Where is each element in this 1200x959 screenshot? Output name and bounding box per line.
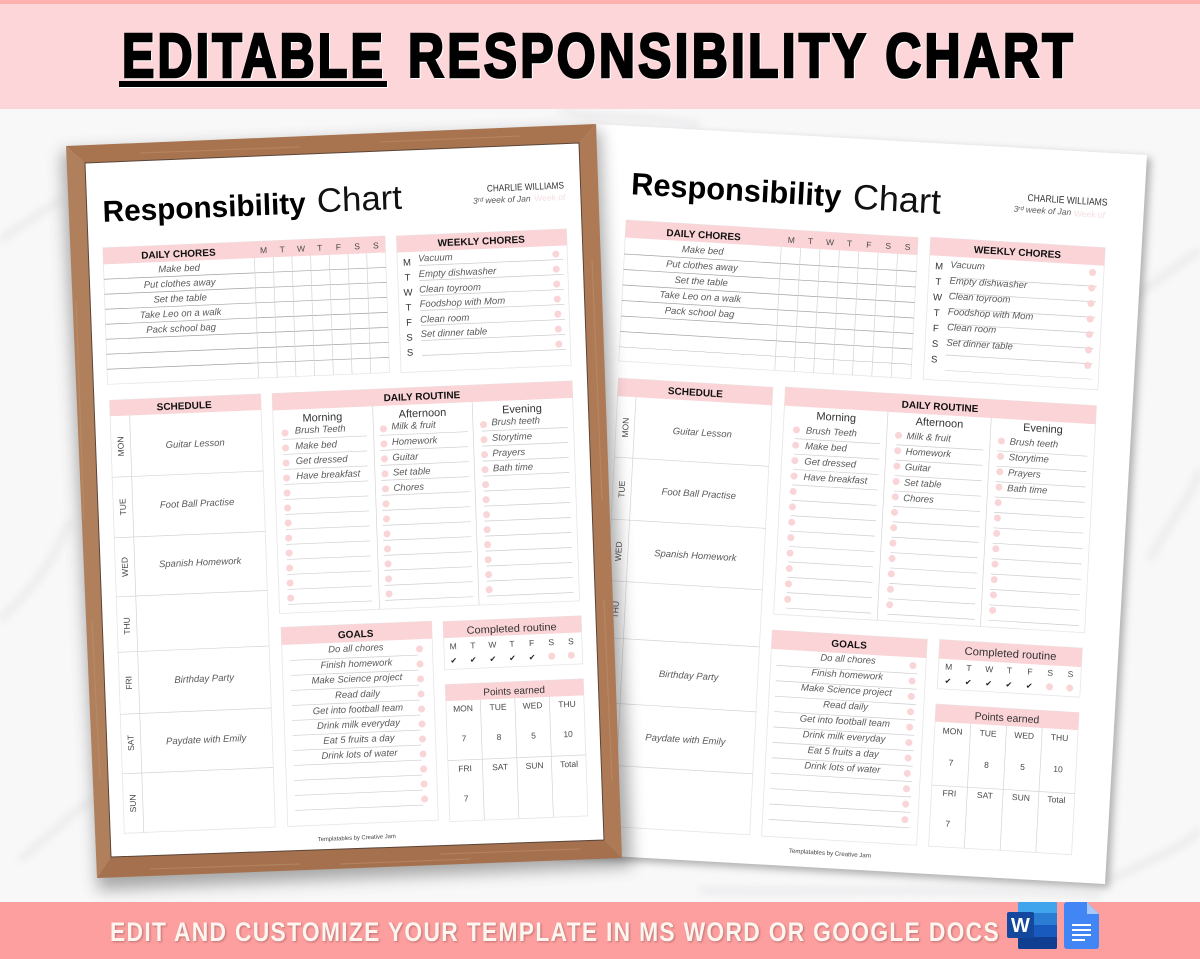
right panel: weekly chores: Foodshop with Mom [948, 307, 1034, 323]
right panel: daily chores: DAILY CHORES [666, 228, 741, 243]
right panel: schedule: Foot Ball Practise [661, 487, 736, 502]
right panel: daily routine: Set table [904, 477, 942, 491]
right panel: completed routine: F [1027, 666, 1033, 677]
left panel: goals: Do all chores [328, 642, 384, 655]
right panel: points earned: SAT [977, 790, 993, 801]
right panel: daily chores: M [787, 235, 795, 245]
left panel: daily chores: Take Leo on a walk [140, 307, 223, 321]
banner title [119, 22, 1076, 91]
right panel: daily routine: Get dressed [804, 456, 857, 471]
right panel: schedule: MON [620, 417, 631, 438]
left panel: daily chores: M [260, 245, 267, 255]
left panel: goals [281, 621, 438, 826]
right panel: daily routine: Guitar [905, 462, 932, 475]
right panel: points earned: THU [1051, 732, 1069, 743]
left panel: daily routine: Brush Teeth [295, 423, 346, 437]
right panel: goals [762, 630, 927, 845]
left panel: daily routine: Brush teeth [491, 415, 540, 428]
right panel: points earned: 7 [948, 758, 954, 768]
right panel: goals: Drink milk everyday [802, 729, 887, 745]
right panel: daily routine: Brush Teeth [806, 425, 857, 439]
right panel: completed routine: S [1047, 668, 1054, 678]
left panel: completed routine: M [450, 641, 457, 651]
right panel: points earned: Points earned [974, 710, 1040, 726]
right panel: schedule [595, 378, 773, 835]
right panel: completed routine: T [966, 663, 972, 673]
left panel: weekly chores: T [404, 273, 411, 284]
left panel: weekly chores: S [406, 333, 413, 344]
right panel: goals: Eat 5 fruits a day [807, 745, 880, 760]
right panel: weekly chores: T [935, 277, 942, 288]
right panel: daily chores: T [847, 238, 852, 249]
left sheet title: Responsibility [102, 187, 307, 229]
left panel: goals: Get into football team [313, 702, 403, 717]
right panel: weekly chores: S [932, 339, 938, 350]
right panel: weekly chores: Empty dishwasher [949, 276, 1028, 291]
left sheet name and week [472, 180, 566, 206]
left panel: daily routine [272, 381, 580, 613]
left panel: schedule: SAT [125, 735, 136, 751]
right panel: daily chores: Set the table [674, 275, 728, 289]
left panel: schedule: FRI [123, 676, 134, 690]
right panel: weekly chores: Vacuum [950, 260, 985, 273]
left panel: daily routine: Get dressed [296, 454, 348, 467]
left panel: schedule: SCHEDULE [157, 400, 212, 413]
left panel: weekly chores [396, 229, 571, 373]
right panel: daily routine: Morning [816, 411, 856, 425]
left panel: daily routine: Set table [393, 466, 431, 479]
right panel: daily routine: Chores [903, 493, 934, 506]
left panel: points earned: WED [522, 700, 543, 711]
right panel: points earned: SUN [1012, 792, 1030, 803]
left panel: daily routine: DAILY ROUTINE [383, 390, 461, 404]
left panel: goals: Read daily [335, 688, 381, 701]
right panel: schedule: Guitar Lesson [672, 426, 732, 441]
right panel: points earned: WED [1014, 730, 1034, 741]
left panel: points earned: TUE [489, 702, 507, 712]
left panel: weekly chores: Foodshop with Mom [420, 296, 505, 310]
right panel: daily chores: S [905, 242, 911, 252]
right panel: schedule: TUE [616, 480, 627, 498]
right sheet title [630, 164, 942, 222]
right panel: completed routine: ✔ [944, 677, 952, 686]
left panel: schedule: WED [119, 557, 130, 577]
left panel: schedule [110, 394, 275, 833]
right panel: points earned: TUE [979, 728, 997, 739]
banner caption: EDIT AND CUSTOMIZE YOUR TEMPLATE IN MS WORD OR GOOGLE DOCS [110, 917, 1000, 947]
left panel: schedule: Spanish Homework [159, 556, 243, 570]
left panel: daily chores [103, 236, 390, 384]
right sheet name and week [1013, 192, 1108, 220]
right panel: goals: GOALS [831, 639, 867, 652]
right panel: completed routine [937, 640, 1082, 697]
right panel: weekly chores: S [931, 354, 938, 366]
left panel: points earned: 7 [464, 793, 469, 804]
left panel: schedule: TUE [117, 498, 128, 516]
right panel: weekly chores: Set dinner table [946, 338, 1013, 353]
right panel: points earned: FRI [942, 788, 957, 799]
left panel: daily chores: S [354, 241, 360, 251]
left panel: completed routine: F [529, 638, 534, 648]
icon: MS Word [1007, 902, 1057, 949]
left panel: daily chores: W [297, 243, 305, 254]
left panel: points earned: SUN [525, 760, 544, 771]
left panel: schedule: MON [115, 436, 126, 457]
left panel: completed routine: ✔ [470, 655, 477, 665]
left panel: daily chores: Put clothes away [144, 277, 217, 291]
left panel: points earned: 5 [531, 730, 536, 741]
right sheet name and week: 3ʳᵈ week of Jan [1013, 204, 1072, 217]
right panel: daily chores: T [808, 236, 813, 246]
right panel: completed routine: Completed routine [964, 646, 1057, 663]
left sheet title [102, 179, 403, 229]
right panel: schedule: THU [610, 601, 621, 619]
right panel: goals: Read daily [823, 699, 870, 713]
left panel: completed routine: ✔ [529, 653, 536, 662]
right panel: completed routine: ✔ [965, 678, 972, 687]
left panel: daily chores: Make bed [158, 263, 201, 275]
top banner [0, 0, 1200, 109]
right panel: completed routine: W [985, 664, 994, 674]
left panel: daily routine: Prayers [492, 447, 526, 459]
right panel: daily routine: Storytime [1008, 452, 1049, 466]
right panel: points earned: MON [942, 726, 963, 737]
right panel: points earned: 10 [1053, 764, 1063, 774]
left panel: daily routine: Evening [502, 403, 542, 416]
right panel: daily chores: Take Leo on a walk [659, 289, 743, 305]
left panel: daily routine: Make bed [295, 439, 338, 452]
left panel: daily chores: T [279, 244, 285, 254]
right panel: weekly chores: WEEKLY CHORES [974, 245, 1062, 261]
right panel: points earned: 8 [984, 760, 989, 770]
left panel: points earned: 8 [497, 732, 502, 742]
right panel: schedule: Spanish Homework [654, 548, 738, 564]
left panel: weekly chores: F [406, 318, 412, 329]
right panel: weekly chores: Clean toyroom [948, 291, 1011, 306]
left panel: daily chores: F [336, 242, 341, 252]
left panel: goals: Finish homework [320, 657, 394, 671]
left panel: schedule: Foot Ball Practise [160, 497, 235, 511]
left panel: weekly chores: WEEKLY CHORES [437, 235, 525, 249]
left panel: completed routine: ✔ [450, 656, 457, 665]
right panel: points earned: 5 [1020, 762, 1025, 772]
right panel: schedule: Paydate with Emily [645, 732, 727, 748]
right sheet footer credit: Templatables by Creative Jam [789, 848, 871, 860]
left panel: schedule: Birthday Party [174, 672, 235, 686]
left panel: schedule: Paydate with Emily [166, 733, 248, 747]
right panel: daily routine: Make bed [805, 441, 848, 454]
left panel: completed routine: ✔ [509, 654, 516, 663]
left panel: goals: Eat 5 fruits a day [323, 733, 396, 747]
left panel: completed routine: ✔ [489, 654, 496, 664]
right panel: daily chores: S [885, 241, 892, 251]
right panel: daily routine: Milk & fruit [906, 431, 951, 445]
left panel: weekly chores: Clean toyroom [419, 282, 481, 296]
left panel: goals: Drink lots of water [321, 748, 398, 762]
right panel: daily chores: Pack school bag [664, 305, 735, 321]
right panel: daily routine: Bath time [1007, 483, 1048, 497]
right panel: goals: Do all chores [820, 653, 876, 667]
left panel: points earned: SAT [492, 762, 508, 772]
left panel: weekly chores: Vacuum [418, 252, 453, 264]
bottom banner [0, 902, 1200, 959]
left panel: weekly chores: Clean room [420, 313, 470, 326]
right panel: daily routine: Afternoon [915, 416, 964, 431]
left panel: daily chores: Pack school bag [146, 322, 217, 336]
left panel: points earned: MON [453, 703, 473, 714]
left panel: daily routine: Bath time [493, 462, 533, 474]
left panel: daily routine: Storytime [492, 431, 532, 444]
left panel: daily chores: S [373, 240, 379, 251]
left panel: daily routine: Milk & fruit [391, 420, 436, 433]
right panel: daily routine [774, 387, 1096, 633]
right panel: schedule: SCHEDULE [668, 386, 723, 400]
left sheet name and week: 3ʳᵈ week of Jan [473, 193, 531, 206]
left panel: weekly chores: M [403, 257, 411, 269]
left panel: daily chores: T [317, 243, 322, 253]
left panel: completed routine: W [488, 639, 497, 650]
right panel: completed routine: ✔ [1005, 680, 1012, 690]
left panel: daily routine: Have breakfast [296, 468, 361, 482]
right panel: schedule: WED [613, 541, 624, 562]
right panel: weekly chores [923, 237, 1105, 390]
right panel: goals: Finish homework [811, 668, 885, 683]
right sheet title: Chart [852, 178, 942, 222]
left panel: schedule: SUN [128, 794, 138, 813]
left panel: completed routine: S [548, 637, 555, 647]
right panel: points earned [929, 704, 1079, 855]
right panel: weekly chores: W [933, 292, 942, 304]
right panel: weekly chores: T [933, 308, 940, 319]
right panel: points earned: 7 [945, 819, 951, 829]
right panel: goals: Make Science project [801, 682, 892, 699]
right panel: points earned: Total [1047, 794, 1066, 805]
right panel: daily chores: Make bed [682, 244, 725, 258]
right panel: weekly chores: Clean room [947, 322, 997, 336]
left panel: daily chores: Set the table [153, 292, 207, 306]
right panel: daily routine: DAILY ROUTINE [901, 400, 979, 415]
right panel: daily routine: Prayers [1008, 468, 1041, 481]
left sheet title: Chart [316, 179, 403, 220]
left panel: points earned: Points earned [483, 685, 545, 699]
right panel: completed routine: M [945, 662, 953, 672]
right panel: goals: Get into football team [799, 713, 890, 730]
left panel: completed routine: T [470, 640, 476, 651]
right sheet name and week: Week of [1074, 208, 1106, 220]
left panel: points earned [445, 679, 588, 822]
icon: MS Word: W [1011, 915, 1030, 937]
right panel: completed routine: ✔ [1026, 681, 1033, 691]
left panel: weekly chores: Set dinner table [421, 326, 487, 340]
right panel: weekly chores: M [935, 261, 943, 273]
right panel: daily routine: Brush teeth [1009, 437, 1058, 451]
left panel: points earned: 7 [462, 733, 467, 744]
right panel: daily routine: Evening [1023, 422, 1063, 436]
right panel: completed routine: S [1067, 669, 1074, 679]
right panel: weekly chores: F [933, 323, 939, 335]
left panel: goals: Drink milk everyday [317, 718, 401, 732]
left panel: daily routine: Guitar [392, 451, 419, 464]
left panel: goals: GOALS [338, 629, 374, 641]
right panel: completed routine: T [1007, 665, 1012, 676]
left panel: schedule: Guitar Lesson [165, 438, 225, 451]
left panel: points earned: Total [560, 759, 578, 769]
right panel: goals: Drink lots of water [804, 760, 881, 776]
right panel: daily routine: Homework [905, 446, 953, 460]
wooden frame [66, 124, 622, 878]
left panel: daily routine: Afternoon [398, 407, 447, 421]
right panel: completed routine: ✔ [985, 679, 992, 688]
left panel: completed routine: S [568, 636, 574, 646]
right panel: daily chores: F [866, 239, 872, 250]
right panel: daily chores: Put clothes away [666, 259, 739, 274]
left sheet name and week: CHARLIE WILLIAMS [487, 180, 564, 195]
left panel: weekly chores: T [405, 303, 412, 314]
right panel: schedule: Birthday Party [659, 669, 720, 684]
right panel: daily chores: W [826, 237, 834, 248]
left panel: completed routine: T [509, 639, 515, 649]
right panel: daily routine: Have breakfast [803, 472, 868, 487]
left panel: points earned: 10 [563, 729, 573, 739]
left panel: weekly chores: W [403, 287, 413, 299]
right sheet title: Responsibility [630, 166, 843, 214]
left panel: completed routine [443, 616, 583, 670]
left panel: weekly chores: Empty dishwasher [418, 266, 497, 280]
left panel: points earned: THU [558, 699, 576, 709]
left sheet footer credit: Templatables by Creative Jam [318, 834, 396, 843]
banner title: EDITABLE [122, 22, 386, 91]
left panel: weekly chores: S [407, 348, 413, 359]
left panel: goals: Make Science project [311, 672, 403, 687]
left panel: points earned: FRI [458, 763, 472, 774]
left panel: daily chores: DAILY CHORES [141, 248, 216, 262]
left panel: schedule: THU [121, 617, 132, 635]
left panel: completed routine: Completed routine [466, 621, 557, 637]
right panel: daily chores [619, 220, 918, 379]
right sheet name and week: CHARLIE WILLIAMS [1027, 193, 1108, 209]
left sheet name and week: Week of [534, 192, 566, 203]
left panel: daily routine: Morning [302, 411, 342, 425]
icon: Google Docs [1064, 902, 1099, 949]
right sheet: plain paper chart [559, 124, 1151, 888]
left sheet: framed chart [62, 124, 632, 890]
left panel: daily routine: Chores [393, 482, 425, 494]
left panel: daily routine: Homework [392, 435, 439, 448]
